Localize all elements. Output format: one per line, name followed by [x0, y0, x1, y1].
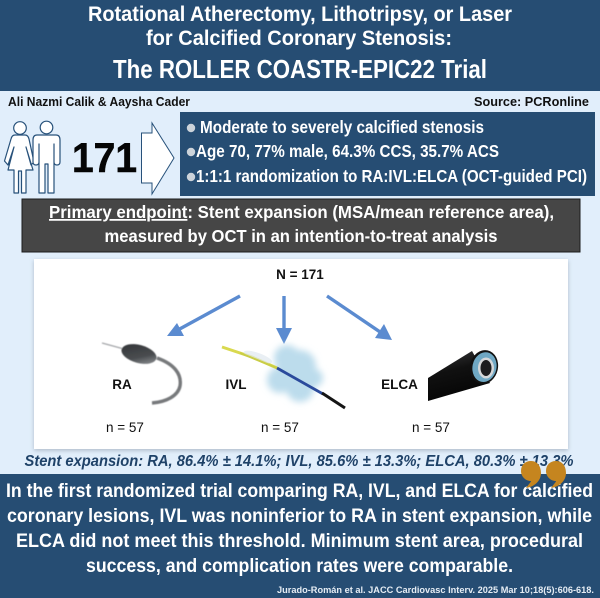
bullet 2: Age 70, 77% male, 64.3% CCS, 35.7% ACS: [196, 141, 499, 161]
count: RA: n = 57: [106, 420, 144, 435]
total N: N = 171: [276, 267, 324, 282]
count: ELCA: n = 57: [412, 420, 450, 435]
stent expansion results: Stent expansion: RA, 86.4% ± 14.1%; IVL, 85.6% ± 13.3%; ELCA, 80.3% ± 13.3%: [24, 453, 574, 470]
authors: Ali Nazmi Calik & Aaysha Cader: [8, 94, 190, 109]
label: IVL: IVL: [225, 377, 247, 392]
label: RA: RA: [112, 377, 132, 392]
icon: rotablator burr: [102, 341, 180, 403]
title banner: The ROLLER COASTR-EPIC22 Trial: [113, 54, 487, 84]
panel: conclusion: [0, 474, 600, 598]
panel: primary endpoint: [22, 199, 580, 252]
panel: primary endpoint: measured by OCT in an intention-to-treat analysis: [104, 226, 498, 246]
title banner: for Calcified Coronary Stenosis:: [146, 26, 452, 50]
arrow: to population: [142, 123, 174, 194]
arrow: to IVL: [276, 296, 292, 344]
icon: patients: [4, 121, 60, 193]
source: Source: PCRonline: [474, 94, 589, 109]
arrow: to RA: [167, 296, 240, 336]
label: ELCA: ELCA: [381, 377, 418, 392]
count: IVL: n = 57: [261, 420, 299, 435]
title banner: [0, 0, 600, 91]
panel: primary endpoint: Primary endpoint: Stent expansion (MSA/mean reference area),: [49, 202, 554, 222]
arrow: to ELCA: [327, 296, 392, 340]
title banner: Rotational Atherectomy, Lithotripsy, or Laser: [88, 2, 513, 26]
panel: randomization: [34, 259, 568, 449]
panel: population: [180, 112, 595, 196]
icon: laser catheter: [428, 347, 501, 401]
citation: Jurado-Román et al. JACC Cardiovasc Interv. 2025 Mar 10;18(5):606-618.: [277, 585, 594, 596]
icon: lithotripsy catheter: [222, 345, 345, 408]
panel: conclusion: success, and complication rates were comparable.: [86, 555, 513, 577]
bullet 1: Moderate to severely calcified stenosis: [200, 117, 484, 137]
sample size: 171: [72, 134, 137, 181]
icon: quotation mark: [521, 461, 566, 488]
